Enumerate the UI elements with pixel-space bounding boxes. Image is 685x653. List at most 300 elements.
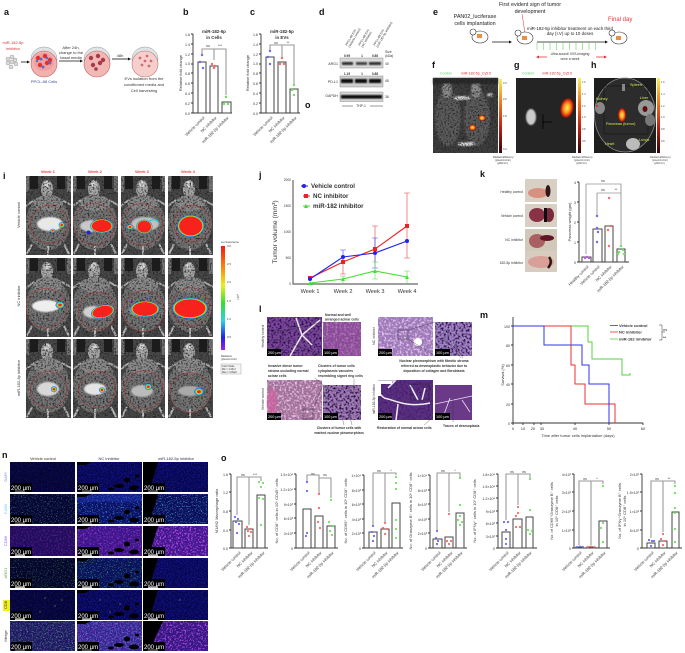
chart: IFN-gamma cells: 0 bbox=[493, 547, 495, 551]
chart: CD69+GranzymeB+ cells: 1×10¹ bbox=[562, 529, 572, 533]
text: protein labels: GAPDH bbox=[325, 94, 338, 98]
panel e: treatment timeline: cells implantation bbox=[454, 21, 496, 27]
panel h: organ fluorescence: 1.2 bbox=[661, 104, 665, 108]
panel l: histology: l bbox=[259, 304, 262, 314]
text: protein labels: ARG1 bbox=[328, 62, 338, 66]
histology: vehicle control: Vehicle control bbox=[261, 388, 265, 410]
panel j: tumour volume line chart: Tumor volume (mm³) bbox=[272, 200, 279, 264]
chart: IFNγ+GranzymeB+ cells: No. of IFNγ⁺Granzyme B⁺ cells bbox=[617, 483, 622, 539]
chart: CD69 cells: miR-182-5p inhibitor bbox=[371, 550, 400, 579]
panel m: survival curve: 10 bbox=[521, 426, 526, 431]
panel i: bioluminescence imaging bbox=[3, 169, 241, 418]
row: ARG1: 200 µm bbox=[144, 582, 164, 588]
panel b: miR-182-5p in cells bar chart: Vehicle control bbox=[184, 115, 206, 137]
photos bbox=[525, 179, 557, 272]
panel c: miR-182-5p in EVs bar chart bbox=[245, 7, 300, 144]
chart: IFN-gamma cells: 9×10³ bbox=[486, 510, 496, 514]
row: NC inhibitor bbox=[16, 258, 213, 337]
histology: NC inhibitor: Nuclear pleomorphism with fibrotic stroma bbox=[399, 359, 469, 363]
panel m: survival curve: m bbox=[480, 310, 488, 320]
panel d: western blot: 1 bbox=[361, 54, 363, 58]
icon: mouse two bbox=[515, 30, 533, 44]
chart: IFNγ+GranzymeB+ cells: 2×10² bbox=[630, 473, 640, 477]
panel g: ex vivo tumour fluorescence: 1.2 bbox=[582, 104, 586, 108]
histology: vehicle control: cytoplasmic vacuoles bbox=[318, 369, 353, 373]
panel m: survival curve: 20 bbox=[506, 403, 510, 407]
panel a: experimental schematic bbox=[3, 7, 164, 93]
chart: Granzyme B cells: * bbox=[454, 469, 456, 473]
chart: CD69 cells: NC inhibitor bbox=[370, 550, 389, 568]
panel h: organ fluorescence: (p/sec/cm²/sr) bbox=[652, 158, 668, 162]
chart: IFNγ+GranzymeB+ cells: ** bbox=[668, 477, 671, 481]
histology: miR-182-5p inhibitor: 200 µm bbox=[379, 415, 392, 419]
histology: miR-182-5p inhibitor: 100 µm bbox=[436, 415, 449, 419]
histology: vehicle control bbox=[261, 364, 364, 435]
panel j: tumour volume line chart: 0 bbox=[289, 282, 291, 286]
panel g: ex vivo tumour fluorescence: (p/sec/cm²/sr) bbox=[574, 158, 590, 162]
panel d: western blot: 1 bbox=[361, 72, 363, 76]
text: protein labels: PD-L1 bbox=[328, 80, 338, 84]
row: ARG1: 200 µm bbox=[11, 582, 31, 588]
panel g: ex vivo tumour fluorescence: 1.6 bbox=[582, 80, 586, 84]
chart: CD69 cells: ns bbox=[377, 469, 381, 473]
row: ARG1 bbox=[3, 558, 208, 588]
histology: vehicle control: stroma occluding normal bbox=[268, 369, 309, 373]
chart: Granzyme B cells: No. of Granzyme B⁺ cells in 10⁵ CD8⁺ cells bbox=[408, 472, 413, 550]
chart: IFN-gamma cells: Vehicle control bbox=[488, 550, 510, 572]
chart: IFNγ+GranzymeB+ cells: Vehicle control bbox=[633, 550, 655, 572]
heading: weeks: Week 3 bbox=[135, 169, 150, 174]
row: NC inhibitor: NC inhibitor bbox=[16, 285, 21, 306]
row: CD8 bbox=[3, 590, 208, 620]
panel k: pancreas photos and weight chart: ns bbox=[601, 188, 605, 192]
colour scale legend: 1.5 bbox=[227, 299, 231, 303]
histology: NC inhibitor: referred as desmoplastic behavior due to bbox=[401, 364, 467, 368]
chart: CD8 cells one: miR-182-5p inhibitor bbox=[306, 550, 335, 579]
panel k: pancreas photos and weight chart: NC inhibitor bbox=[594, 264, 613, 282]
chart: CD69 cells: 6×10³ bbox=[352, 503, 362, 507]
histology: NC inhibitor: deposition of collagen and fibroblasts bbox=[403, 369, 465, 373]
panel j: tumour volume line chart: Week 4 bbox=[398, 289, 416, 295]
chart: M1/M2 ratio: 0.8 bbox=[223, 510, 228, 514]
panel h: organ fluorescence: Lungs bbox=[639, 138, 649, 142]
row: DAPI: 200 µm bbox=[78, 486, 98, 492]
panel d: western blot: 45 bbox=[385, 79, 389, 83]
colour scale legend: Max = 3.00e8 bbox=[222, 371, 237, 374]
chart: CD69+GranzymeB+ cells: 3×10¹ bbox=[562, 491, 572, 495]
panel h: organ fluorescence: Radiant Efficiency bbox=[650, 155, 671, 159]
chart: M1/M2 ratio: 1.6 bbox=[223, 473, 228, 477]
chart: IFN-gamma cells: ns bbox=[522, 470, 526, 474]
panel k: pancreas photos and weight chart: ** bbox=[615, 188, 618, 192]
histology: NC inhibitor bbox=[372, 317, 472, 373]
chart: CD8 cells one: 3×10³ bbox=[284, 532, 294, 536]
chart: CD69+GranzymeB+ cells bbox=[549, 473, 610, 579]
panel b: miR-182-5p in cells bar chart: 1.2 bbox=[185, 53, 190, 57]
chart: Granzyme B cells: NC inhibitor bbox=[435, 550, 454, 568]
chart: M1/M2 ratio: miR-182-5p inhibitor bbox=[237, 550, 266, 579]
chart: Granzyme B cells: 1×10⁴ bbox=[417, 474, 427, 478]
text: 48h: 48h bbox=[117, 53, 123, 58]
heading: weeks: Week 4 bbox=[181, 169, 196, 174]
panel j: tumour volume line chart: 500 bbox=[286, 256, 291, 260]
text: lane headers bbox=[344, 19, 393, 48]
panel m: survival curve: Survival (%) bbox=[500, 364, 505, 386]
panel d: western blot: Size bbox=[385, 50, 392, 54]
legend: miR-182 inhibitor bbox=[313, 203, 364, 210]
colour scale legend: ×10⁸ bbox=[236, 293, 240, 300]
histology: healthy control: Normal and well bbox=[325, 313, 351, 317]
panel g: ex vivo tumour fluorescence bbox=[514, 60, 593, 165]
panel b: miR-182-5p in cells bar chart: 0.2 bbox=[185, 102, 190, 106]
colour scale legend: Min = 1.00e7 bbox=[222, 368, 237, 371]
chart: M1/M2 ratio: 0.0 bbox=[223, 547, 228, 551]
histology: vehicle control: marked nuclear pleomorphism bbox=[314, 431, 364, 435]
panel g: ex vivo tumour fluorescence: 0.8 bbox=[582, 127, 586, 131]
panel k: pancreas photos and weight chart: NC inhibitor bbox=[505, 238, 524, 242]
panel k: pancreas photos and weight chart: Pancreas weight (gm) bbox=[567, 202, 572, 241]
histology: vehicle control: acinar cells bbox=[268, 374, 287, 378]
panel c: miR-182-5p in EVs bar chart: ** bbox=[287, 41, 290, 45]
panel f: whole-body fluorescence: Control bbox=[440, 72, 452, 76]
panel b: miR-182-5p in cells bar chart: 0.6 bbox=[185, 82, 190, 86]
panel b: miR-182-5p in cells bar chart bbox=[178, 7, 232, 144]
text: EV isolation: EVs isolation from the bbox=[125, 76, 164, 81]
panel e: treatment timeline: day (I.V) up to 10 doses bbox=[547, 31, 594, 36]
legend: NC inhibitor bbox=[313, 193, 349, 200]
icon: vesicle cluster bbox=[6, 55, 18, 69]
chart: CD8 cells one: No. of CD8⁺ cells in 10⁵ CD45⁺ cells bbox=[274, 478, 279, 544]
colour scale legend: Radiance bbox=[221, 354, 233, 358]
chart: M1/M2 ratio: ns bbox=[241, 473, 245, 477]
histology: miR-182-5p inhibitor: Traces of desmoplasia bbox=[443, 424, 479, 428]
panel m: survival curve: 60 bbox=[506, 364, 510, 368]
panel m: survival curve bbox=[480, 310, 667, 438]
panel e: treatment timeline: Ultra-sound/ IVIS-imaging bbox=[551, 52, 590, 56]
row: CD86: 200 µm bbox=[11, 550, 31, 556]
chart: IFNγ+GranzymeB+ cells: NC inhibitor bbox=[648, 550, 667, 568]
colour scale legend bbox=[221, 240, 241, 374]
heading: weeks: Week 1 bbox=[41, 169, 56, 174]
panel e: treatment timeline: PAN02_luciferase bbox=[454, 14, 496, 20]
panel c: miR-182-5p in EVs bar chart: miR-182-5p bbox=[270, 29, 294, 34]
panel h: organ fluorescence: 1.0 bbox=[661, 115, 665, 119]
panel h: organ fluorescence: (µW/cm²) bbox=[654, 161, 665, 165]
panel m: survival curve: 30 bbox=[540, 426, 545, 431]
chart: Granzyme B cells bbox=[408, 469, 467, 579]
panel e: treatment timeline: miR-182-5p inhibitor treatment on each third bbox=[527, 26, 614, 31]
panel k: pancreas photos and weight chart: ns bbox=[601, 179, 605, 183]
panel f: whole-body fluorescence: 0.4 bbox=[503, 147, 507, 151]
panel e: treatment timeline bbox=[433, 2, 632, 61]
panel b: miR-182-5p in cells bar chart: 0.8 bbox=[185, 72, 190, 76]
legend: ** bbox=[663, 335, 667, 340]
panel h: organ fluorescence: Spleen bbox=[630, 83, 642, 87]
chart: IFNγ+GranzymeB+ cells: 1.5×10² bbox=[627, 491, 640, 495]
panel b: miR-182-5p in cells bar chart: ns bbox=[206, 44, 210, 48]
panel f: whole-body fluorescence: 2.6 bbox=[503, 97, 507, 101]
panel h: organ fluorescence: h bbox=[591, 60, 596, 70]
legend: miR-182 inhibitor bbox=[619, 336, 652, 342]
row: DAPI: DAPI bbox=[3, 472, 8, 482]
panel a: experimental schematic: a bbox=[4, 7, 10, 17]
histology: healthy control: arranged acinar cells bbox=[325, 318, 359, 322]
panel j: tumour volume line chart bbox=[258, 170, 418, 295]
chart: IFN-gamma cells: ns bbox=[510, 470, 514, 474]
error bars bbox=[340, 193, 410, 284]
column headers: miR-182-5p inhibitor bbox=[158, 456, 195, 461]
chart: M1/M2 ratio: 0.4 bbox=[223, 529, 228, 533]
panel d: western blot: 0.86 bbox=[372, 54, 378, 58]
panel m: survival curve: 50 bbox=[607, 426, 612, 431]
panel m: survival curve: 80 bbox=[506, 344, 510, 348]
chart: IFNγ+GranzymeB+ cells: ns bbox=[655, 477, 659, 481]
chart: CD69+GranzymeB+ cells: * bbox=[596, 477, 598, 481]
panel c: miR-182-5p in EVs bar chart: 1.4 bbox=[253, 43, 258, 47]
legend: Vehicle control bbox=[619, 323, 647, 328]
panel f: whole-body fluorescence: 3.4 bbox=[503, 81, 507, 85]
row: ARG1: 200 µm bbox=[78, 582, 98, 588]
panel e: treatment timeline: Final day bbox=[608, 17, 632, 23]
chart: IFN-gamma cells: NC inhibitor bbox=[503, 550, 522, 568]
panel b: miR-182-5p in cells bar chart: miR-182-5p bbox=[202, 29, 226, 34]
panel d: western blot: 0.88 bbox=[372, 72, 378, 76]
panel m: survival curve: 60 bbox=[641, 426, 646, 431]
panel m: survival curve: 0 bbox=[508, 422, 510, 426]
row: CD86: 200 µm bbox=[144, 550, 164, 556]
chart: CD8 cells one: 0 bbox=[291, 547, 293, 551]
chart: IFN-gamma cells: miR-182-5p inhibitor bbox=[504, 550, 533, 579]
chart: CD69 cells: 1×10⁴ bbox=[351, 474, 361, 478]
panel b: miR-182-5p in cells bar chart: 1.6 bbox=[185, 33, 190, 37]
histology: vehicle control: Invasive dense tumor bbox=[268, 364, 303, 368]
row: F4/80: F4/80 bbox=[3, 503, 8, 514]
text: inhibitor label: inhibitor bbox=[6, 46, 21, 51]
panel c: miR-182-5p in EVs bar chart: c bbox=[250, 7, 255, 17]
panel f: whole-body fluorescence: 1.8 bbox=[503, 114, 507, 118]
panel c: miR-182-5p in EVs bar chart: miR-182-5p inhibitor bbox=[269, 115, 298, 144]
panel m: survival curve: 40 bbox=[506, 383, 510, 387]
row: miR-182-5p inhibitor: miR-182-5p inhibitor bbox=[16, 359, 21, 396]
panel g: ex vivo tumour fluorescence: (µW/cm²) bbox=[576, 161, 587, 165]
chart: IFNγ+GranzymeB+ cells: 0 bbox=[637, 547, 639, 551]
histology: miR-182-5p inhibitor: miR-182-5p inhibitor bbox=[372, 383, 376, 414]
chart: IFNγ+GranzymeB+ cells: 5×10¹ bbox=[630, 529, 640, 533]
chart: CD8 cells one: 6×10³ bbox=[284, 517, 294, 521]
histology: vehicle control: Clusters of tumor cells bbox=[318, 364, 355, 368]
chart: Granzyme B cells: 8×10³ bbox=[418, 489, 428, 493]
legend: ns bbox=[663, 327, 667, 332]
chart: IFNγ+GranzymeB+ cells: 1×10² bbox=[630, 510, 640, 514]
icon: mouse one bbox=[470, 29, 488, 43]
row: F4/80: 200 µm bbox=[11, 518, 31, 524]
chart: CD8 cells one: 1.5×10⁴ bbox=[280, 473, 293, 477]
panel g: ex vivo tumour fluorescence: miR-182-5p_Cy5.5 bbox=[542, 72, 572, 76]
chart: CD69+GranzymeB+ cells: 4×10¹ bbox=[562, 473, 572, 477]
panel m: survival curve: 40 bbox=[573, 426, 578, 431]
panel k: pancreas photos and weight chart: 3 bbox=[574, 201, 576, 205]
panel d: western blot bbox=[305, 7, 393, 110]
chart: IFN-gamma cells: 1.2×10⁴ bbox=[482, 497, 495, 501]
text: lane headers: PPCL-88 EVs bbox=[344, 28, 357, 46]
heading: weeks: Week 2 bbox=[88, 169, 103, 174]
chart: CD8 cells one: ns bbox=[323, 473, 327, 477]
panel d: western blot: 0.99 bbox=[344, 54, 350, 58]
row: DAPI bbox=[3, 462, 208, 492]
row: Merge bbox=[3, 621, 208, 651]
chart: CD8 cells one bbox=[274, 472, 338, 579]
panel h: organ fluorescence: Liver bbox=[640, 96, 649, 100]
histology: healthy control bbox=[261, 313, 361, 356]
row: F4/80 bbox=[3, 494, 208, 524]
chart: IFNγ+GranzymeB+ cells: miR-182-5p inhibitor bbox=[650, 550, 679, 579]
timeline with doses bbox=[537, 40, 608, 50]
panel j: tumour volume line chart: Week 3 bbox=[366, 289, 384, 295]
panel d: western blot: (kDa) bbox=[385, 54, 393, 58]
row: CD8: 200 µm bbox=[78, 614, 98, 620]
chart: CD8 cells one: NC inhibitor bbox=[304, 550, 323, 568]
chart: M1/M2 ratio: Vehicle control bbox=[220, 550, 242, 572]
colour scale legend: Luminescence bbox=[221, 240, 239, 244]
panel j: tumour volume line chart: Week 2 bbox=[334, 289, 352, 295]
chart: CD69 cells bbox=[343, 469, 403, 579]
panel d: western blot: 40 bbox=[385, 62, 389, 66]
histology: miR-182-5p inhibitor bbox=[372, 380, 479, 430]
panel c: miR-182-5p in EVs bar chart: in EVs bbox=[275, 35, 289, 40]
panel h: organ fluorescence: 1.6 bbox=[661, 80, 665, 84]
text: lane headers: (miR-182-5p inhibitor) bbox=[375, 21, 393, 48]
chart: IFN-gamma cells bbox=[472, 470, 537, 579]
panel h: organ fluorescence: 0.6 bbox=[661, 139, 665, 143]
panel o: flow cytometry bar charts bbox=[214, 453, 682, 579]
image: ARG1 blot bbox=[340, 58, 383, 68]
panel c: miR-182-5p in EVs bar chart: 1.6 bbox=[253, 33, 258, 37]
row: vehicle control bbox=[16, 176, 213, 255]
panel d: western blot: 36 bbox=[385, 95, 389, 99]
text: EV isolation: conditioned media and bbox=[124, 82, 164, 87]
panel m: survival curve: 0 bbox=[512, 426, 515, 431]
panel j: tumour volume line chart: Week 1 bbox=[301, 289, 319, 295]
panel c: miR-182-5p in EVs bar chart: 1.2 bbox=[253, 53, 258, 57]
panel f: whole-body fluorescence: Radiant Efficiency bbox=[493, 155, 514, 159]
panel f: whole-body fluorescence: miR-182-5p_Cy5.5 bbox=[461, 72, 491, 76]
chart: CD69 cells: No. of CD69⁺ cells in 10⁵ CD8⁺ cells bbox=[343, 478, 348, 544]
colour scale legend: 1.0 bbox=[227, 317, 231, 321]
panel k: pancreas photos and weight chart: 182-5p inhibitor bbox=[500, 261, 524, 265]
row: ARG1: ARG1 bbox=[3, 567, 8, 578]
text: media change: After 24h, bbox=[62, 45, 80, 50]
panel e: treatment timeline: once a week bbox=[560, 57, 580, 61]
chart: IFN-gamma cells: 1.8×10⁴ bbox=[482, 473, 495, 477]
legend bbox=[301, 183, 364, 210]
chart: Granzyme B cells: 2×10³ bbox=[418, 532, 428, 536]
chart: CD69+GranzymeB+ cells: in 10⁵ CD8⁺ cells bbox=[554, 496, 559, 526]
panel k: pancreas photos and weight chart: Healthy control bbox=[500, 190, 523, 194]
panel j: tumour volume line chart: j bbox=[258, 170, 262, 180]
colour scale legend: 3.0 bbox=[227, 244, 231, 248]
histology: NC inhibitor: 100 µm bbox=[436, 351, 449, 355]
panel h: organ fluorescence: Kidney bbox=[596, 97, 608, 101]
panel k: pancreas photos and weight chart: Healthy control bbox=[567, 264, 590, 287]
colour scale legend: Color Scale bbox=[222, 365, 235, 368]
column headers: NC inhibitor bbox=[99, 456, 120, 461]
panel g: ex vivo tumour fluorescence: Radiant Efficiency bbox=[572, 155, 593, 159]
chart: CD69+GranzymeB+ cells: Vehicle control bbox=[561, 550, 583, 572]
row: F4/80: 200 µm bbox=[78, 518, 98, 524]
row: Merge: Merge bbox=[3, 630, 8, 642]
legend: NC inhibitor bbox=[619, 330, 642, 334]
text: media change: basal media bbox=[60, 55, 83, 60]
panel c: miR-182-5p in EVs bar chart: 0.2 bbox=[253, 102, 258, 106]
colour scale legend: 2.0 bbox=[227, 280, 231, 284]
panel g: ex vivo tumour fluorescence: g bbox=[514, 60, 520, 70]
column headers: Vehicle control bbox=[30, 456, 56, 461]
panel m: survival curve: Time after tumor cells implantation (days) bbox=[541, 433, 615, 438]
histology: NC inhibitor: 200 µm bbox=[379, 351, 392, 355]
legend bbox=[610, 323, 667, 342]
chart: CD8 cells one: 9×10³ bbox=[284, 503, 294, 507]
panel k: pancreas photos and weight chart: Vehicle control bbox=[501, 214, 523, 218]
histology: healthy control: 200 µm bbox=[268, 351, 281, 355]
panel c: miR-182-5p in EVs bar chart: NC inhibitor bbox=[267, 115, 286, 133]
chart: CD69 cells: 0 bbox=[359, 547, 361, 551]
chart: CD69 cells: Vehicle control bbox=[355, 550, 377, 572]
panel c: miR-182-5p in EVs bar chart: 0.6 bbox=[253, 82, 258, 86]
histology: healthy control: 100 µm bbox=[324, 351, 337, 355]
chart: CD69 cells: 2×10³ bbox=[352, 532, 362, 536]
text: lane headers: PPCL-88 EVs bbox=[357, 28, 370, 46]
panel f: whole-body fluorescence: (p/sec/cm²/sr) bbox=[495, 158, 511, 162]
panel f: whole-body fluorescence bbox=[432, 60, 514, 165]
panel b: miR-182-5p in cells bar chart: 1.4 bbox=[185, 43, 190, 47]
panel j: tumour volume line chart: 1000 bbox=[284, 230, 291, 234]
panel h: organ fluorescence: 0.8 bbox=[661, 127, 665, 131]
panel b: miR-182-5p in cells bar chart: 1.0 bbox=[185, 62, 190, 66]
panel k: pancreas photos and weight chart: Vehicle control bbox=[579, 264, 601, 286]
panel b: miR-182-5p in cells bar chart: 0.0 bbox=[185, 112, 190, 116]
chart: CD69+GranzymeB+ cells: NC inhibitor bbox=[576, 550, 595, 568]
panel k: pancreas photos and weight chart: 0 bbox=[574, 261, 576, 265]
panel l: histology bbox=[259, 304, 479, 435]
row: miR-182-5p inhibitor bbox=[16, 339, 213, 418]
row: Merge: 200 µm bbox=[78, 645, 98, 651]
panel m: survival curve: 20 bbox=[531, 426, 536, 431]
row: DAPI: 200 µm bbox=[144, 486, 164, 492]
panel n: immunofluorescence grid: n bbox=[2, 450, 8, 460]
panel j: tumour volume line chart: 2000 bbox=[284, 178, 291, 182]
chart: CD69+GranzymeB+ cells: ns bbox=[583, 477, 587, 481]
chart: M1/M2 ratio: M1/M2 Macrophage ratio bbox=[214, 488, 219, 533]
text: EV isolation: Cell harvesting bbox=[131, 88, 157, 93]
chart: IFNγ+GranzymeB+ cells: in 10⁵ CD8⁺ cells bbox=[622, 496, 627, 526]
text: media change: change to the bbox=[59, 50, 84, 55]
panel c: miR-182-5p in EVs bar chart: 0.0 bbox=[253, 112, 258, 116]
panel b: miR-182-5p in cells bar chart: b bbox=[183, 7, 189, 17]
row: CD86: 200 µm bbox=[78, 550, 98, 556]
chart: CD69+GranzymeB+ cells: No. of CD69⁺Granzyme B⁺ cells bbox=[549, 482, 554, 540]
panel f: whole-body fluorescence: (µW/cm²) bbox=[497, 161, 508, 165]
panel h: organ fluorescence bbox=[591, 60, 671, 165]
panel g: ex vivo tumour fluorescence: 1.4 bbox=[582, 92, 586, 96]
histology: vehicle control: 100 µm bbox=[324, 415, 337, 419]
colour scale legend: (p/sec/cm²/sr) bbox=[221, 357, 237, 361]
panel c: miR-182-5p in EVs bar chart: Relative fold change bbox=[245, 54, 250, 91]
panel b: miR-182-5p in cells bar chart: 0.4 bbox=[185, 92, 190, 96]
panel g: ex vivo tumour fluorescence: 1.0 bbox=[582, 115, 586, 119]
row: Merge: 200 µm bbox=[144, 645, 164, 651]
panel o: flow cytometry bar charts: o bbox=[221, 453, 227, 463]
panel e: treatment timeline: development bbox=[515, 9, 546, 15]
